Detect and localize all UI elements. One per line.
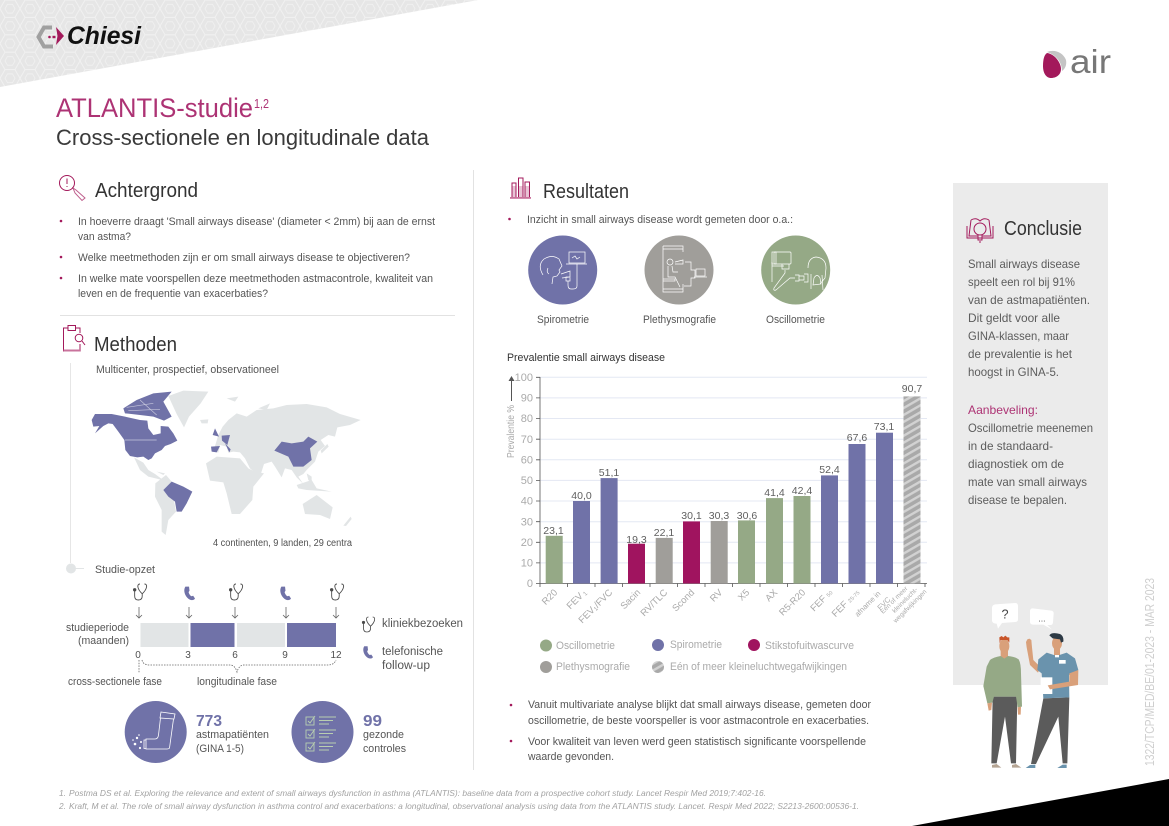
legend: timeline: kliniekbezoeken (382, 618, 463, 630)
logo: Chiesi: Chiesi (67, 22, 142, 50)
text: conclusion (968, 257, 1090, 379)
y axis labels: 60 (521, 454, 533, 466)
speech bubble: question (992, 603, 1018, 629)
bullets: results: Voor kwaliteit van leven werd geen statistisch significante voorspellende (528, 736, 866, 748)
y axis labels: 90 (521, 392, 533, 404)
legend: chart: Plethysmografie (556, 661, 630, 673)
brace: phases (139, 660, 336, 673)
x axis labels: FEV (577, 605, 597, 626)
text: patients label: astmapatiënten (196, 729, 269, 741)
speech bubble: question: ? (1001, 608, 1009, 622)
footnotes: Postma DS et al. Exploring the relevance and extent of small airways dysfunction in asthma (ATLANTIS): baseline data from a prospective cohort study. Lancet Respir Med 2019;7:402-16. (69, 788, 766, 798)
title: Cross-sectionele en longitudinale data (56, 125, 430, 150)
text: conclusion: speelt een rol bij 91% (968, 275, 1075, 289)
axis: months (135, 650, 342, 661)
marker: studie-opzet (66, 564, 84, 574)
axis: months: 3 (185, 650, 191, 661)
label: spirometrie: Spirometrie (537, 314, 589, 326)
legend: chart: Spirometrie (670, 639, 722, 651)
text: recommendation: Oscillometrie meenemen (968, 421, 1093, 435)
x axis labels: X5 (736, 587, 752, 603)
person: right (1026, 633, 1078, 768)
icon: inhaler (132, 712, 175, 749)
x axis labels: RV/TLC (639, 587, 670, 619)
x axis labels: R20 (540, 587, 560, 607)
illustration: two people talking (983, 603, 1078, 768)
legend: timeline: telefonische (382, 646, 443, 658)
value labels: 30,1 (681, 510, 702, 522)
bullets: results: oscillometrie, de beste voorspeller is voor astmacontrole en exacerbaties. (528, 715, 869, 727)
label: plethysmografie: Plethysmografie (643, 314, 716, 326)
chart: timeline (66, 584, 463, 688)
text: recommendation: Aanbeveling: (968, 403, 1038, 417)
heading: resultaten: Resultaten (543, 181, 629, 203)
text: conclusion: GINA-klassen, maar (968, 329, 1069, 343)
heading: achtergrond: Achtergrond (95, 180, 198, 202)
x axis labels: Scond (670, 587, 697, 614)
text: controls label: gezonde (363, 729, 404, 741)
value labels: 30,6 (737, 510, 757, 522)
text: recommendation: mate van small airways (968, 475, 1087, 489)
y axis labels: 40 (521, 496, 533, 508)
icon: magnifier (60, 176, 85, 200)
text: recommendation (968, 403, 1093, 507)
footnotes: 1. (59, 788, 66, 798)
text: recommendation: diagnostiek om de (968, 457, 1064, 471)
value labels: 51,1 (599, 467, 619, 479)
bullets: achtergrond: In welke mate voorspellen deze meetmethoden astmacontrole, kwaliteit van (78, 273, 433, 285)
x axis labels: wegafwijkingen (892, 588, 929, 625)
label: study period: studieperiode (66, 622, 129, 634)
bullets: results: waarde gevonden. (527, 751, 614, 763)
legend: chart: Stikstofuitwascurve (765, 640, 854, 652)
x axis labels: kleinelucht- (891, 586, 919, 615)
text: 773: 773 (196, 713, 222, 730)
footnotes: 2. (58, 801, 66, 811)
labels: phases (68, 676, 277, 688)
value labels: 52,4 (819, 464, 840, 476)
axes (536, 377, 927, 587)
value labels: 22,1 (654, 527, 674, 539)
text: 99: 99 (363, 713, 382, 730)
y axis labels: 0 (527, 578, 533, 590)
bullets: results (510, 699, 871, 763)
value labels: 19,3 (626, 534, 647, 546)
icon: spirometrie (528, 236, 597, 304)
panel: achtergrond (60, 176, 435, 300)
x axis labels: Eén of meer (879, 585, 910, 615)
y axis labels: 20 (521, 537, 533, 549)
label: oscillometrie: Oscillometrie (766, 314, 825, 326)
text: multicenter: Multicenter, prospectief, observationeel (96, 364, 279, 376)
heading: chart title: Prevalentie small airways disease (507, 352, 665, 364)
text: conclusion: van de astmapatiënten. (968, 293, 1090, 307)
icon: checklist (306, 716, 336, 751)
title: ATLANTIS-studie (56, 93, 253, 123)
panel: conclusie (953, 183, 1108, 685)
heading: conclusie: Conclusie (1004, 218, 1082, 240)
title (56, 93, 430, 150)
text: controls label: controles (363, 743, 406, 755)
icon: oscillometrie (761, 236, 830, 304)
heading: studie-opzet: Studie-opzet (95, 564, 155, 576)
text: recommendation: disease te bepalen. (968, 493, 1067, 507)
logo: air: air (1070, 43, 1111, 80)
y axis labels: 80 (521, 413, 533, 425)
heading: methoden: Methoden (94, 334, 177, 356)
stat: healthy controls (292, 701, 406, 763)
value labels (543, 383, 922, 546)
value labels: 30,3 (709, 510, 729, 522)
axis: months: 0 (135, 650, 141, 661)
x axis labels: RV (708, 587, 726, 604)
axis: months: 9 (282, 650, 288, 661)
label: study period: (maanden) (78, 635, 129, 647)
y axis labels: 70 (521, 434, 533, 446)
text: conclusion: Small airways disease (968, 257, 1080, 271)
chart: world map (92, 391, 361, 535)
text: controls label (363, 729, 406, 755)
y axis labels: 10 (521, 558, 533, 570)
bullet: intro: Inzicht in small airways disease wordt gemeten door o.a.: (527, 214, 793, 226)
text: patients label: (GINA 1-5) (196, 743, 244, 755)
value labels: 42,4 (792, 485, 812, 497)
x axis labels: 1 (581, 590, 590, 599)
labels: phases: cross-sectionele fase (68, 676, 162, 688)
value labels: 73,1 (874, 421, 894, 433)
bullets: results: Vanuit multivariate analyse blijkt dat small airways disease, gemeten door (528, 699, 871, 711)
y axis labels (515, 372, 533, 590)
icon: bar chart (510, 178, 531, 199)
bullets: achtergrond: leven en de frequentie van exacerbaties? (78, 288, 268, 300)
title: 1,2 (254, 96, 269, 111)
bullets: achtergrond: van astma? (78, 231, 131, 243)
x axis labels: FEF 50 (808, 587, 835, 614)
x axis labels: R5-R20 (777, 587, 808, 618)
x axis labels: afname in (853, 589, 882, 619)
person: left (983, 636, 1022, 768)
bullets: achtergrond: In hoeverre draagt 'Small airways disease' (diameter < 2mm) bij aan de ernst (78, 216, 435, 228)
value labels: 90,7 (902, 383, 922, 395)
stat: asthma patients (125, 701, 269, 763)
logo: air (1043, 43, 1111, 80)
x axis labels: FEF 25-75 (830, 587, 862, 620)
footnotes: Kraft, M et al. The role of small airway dysfunction in asthma control and exacerbations: a longitudinal, observational analysis using data from the ATLANTIS study. Lancet. Respir Med 2022; S2213-2600:00536-1. (69, 801, 859, 811)
text: document code: 1322/TCP/MED/BE/01-2023 - MAR 2023 (1143, 578, 1157, 766)
axis: months: 12 (330, 650, 342, 661)
text: map caption: 4 continenten, 9 landen, 29 centra (213, 538, 352, 549)
arrows: timeline (136, 607, 339, 618)
speech bubble: dots (1030, 608, 1054, 629)
icon: plethysmografie (644, 236, 714, 304)
speech bubble: dots: ... (1038, 613, 1046, 623)
header pattern triangle (0, 0, 478, 87)
icon: clipboard (64, 326, 85, 352)
labels: phases: longitudinale fase (197, 676, 277, 688)
label: study period (66, 622, 129, 647)
x axis labels: Sacin (619, 587, 643, 612)
y axis labels: 30 (521, 516, 533, 528)
chart: prevalence bars (505, 372, 929, 626)
legend: chart: Oscillometrie (556, 640, 615, 652)
x axis labels: FEV (565, 591, 586, 612)
y axis title: Prevalentie % (505, 405, 517, 458)
x axis labels: /FVC (592, 587, 615, 610)
text: patients label (196, 729, 269, 755)
panel: methoden (64, 326, 463, 763)
y axis labels: 50 (521, 475, 533, 487)
text: conclusion: Dit geldt voor alle (968, 311, 1060, 325)
panel: resultaten (505, 178, 929, 763)
grid (540, 377, 927, 563)
bullets: achtergrond (60, 216, 435, 300)
legend: chart (540, 639, 854, 673)
legend: timeline (362, 617, 463, 672)
icon: book and bulb (967, 219, 993, 242)
legend: chart: Eén of meer kleineluchtwegafwijkingen (670, 661, 847, 673)
y axis labels: 100 (515, 372, 533, 384)
x axis labels: AX (763, 587, 781, 604)
divider (473, 170, 474, 770)
bars: study period (140, 623, 336, 647)
text: recommendation: in de standaard- (968, 439, 1053, 453)
text: conclusion: de prevalentie is het (968, 347, 1073, 361)
value labels: 41,4 (764, 487, 785, 499)
footnotes (58, 788, 859, 811)
axis: months: 6 (232, 650, 238, 661)
bullets: achtergrond: Welke meetmethoden zijn er om small airways disease te objectiveren? (78, 252, 410, 264)
footer black corner (912, 779, 1169, 826)
value labels: 67,6 (847, 432, 867, 444)
icons: visit markers (133, 584, 344, 600)
x axis labels: FVC (875, 595, 893, 612)
value labels: 23,1 (543, 525, 564, 537)
bars (546, 396, 920, 584)
text: conclusion: hoogst in GINA-5. (968, 365, 1059, 379)
x axis labels (540, 585, 929, 626)
x axis labels: 1 (593, 606, 600, 613)
legend: timeline: follow-up (382, 660, 430, 672)
value labels: 40,0 (571, 490, 592, 502)
